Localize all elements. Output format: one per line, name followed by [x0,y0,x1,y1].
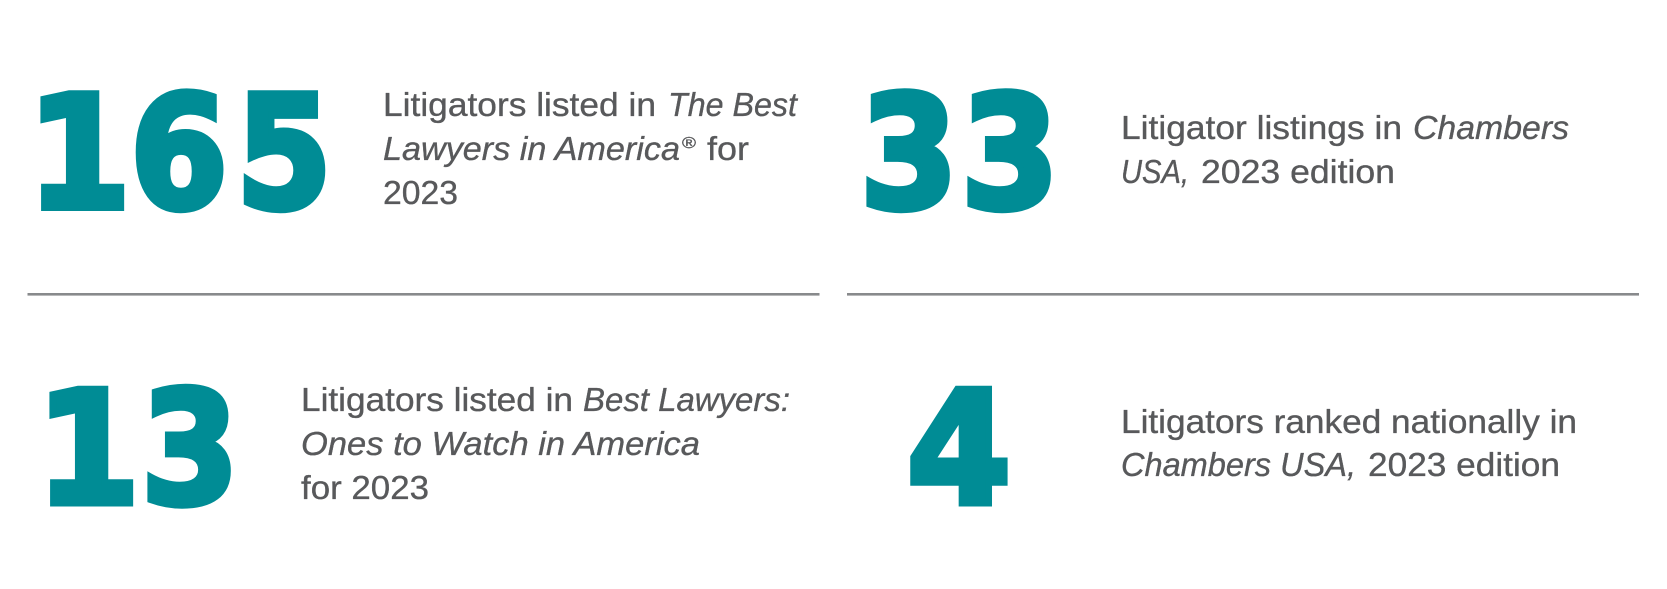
description: The Best Lawyers in America: The Best [668,87,799,124]
description: Chambers USA listings: 2023 edition [1201,154,1395,191]
big number: 33: 3 [860,62,958,244]
description: Ones to Watch in America: Best Lawyers: [583,382,790,419]
description: ranked nationally in Chambers USA: Litigators ranked nationally in [1121,404,1577,441]
big number: 13: 3 [141,358,239,540]
description: The Best Lawyers in America: Lawyers in America [383,131,680,168]
big number: 165 [27,62,332,245]
description: Chambers USA listings: USA, [1121,154,1189,191]
panel: 13 in Best Lawyers Ones to Watch [36,358,790,541]
description: Ones to Watch in America [301,382,790,507]
description: The Best Lawyers in America: Litigators listed in [383,87,656,124]
description: The Best Lawyers in America [383,87,799,212]
panel: 4 ranked nationally [907,359,1577,541]
description: Ones to Watch in America: for 2023 [301,470,429,507]
description: ranked nationally in Chambers USA [1121,404,1577,484]
divider: left [28,293,820,296]
big number: 33: 3 [961,62,1059,244]
description: ranked nationally in Chambers USA: Chambers USA, [1121,447,1356,484]
big number: 165: 1 [27,64,131,245]
description: The Best Lawyers in America: ® [682,135,696,152]
panel: 33 listings in Chambers USA [860,62,1569,244]
description: Ones to Watch in America: Litigators listed in [301,382,573,419]
description: Chambers USA listings [1121,110,1569,191]
big number: 33 [860,62,1059,244]
divider: right [847,293,1639,296]
description: The Best Lawyers in America: 2023 [383,175,458,212]
description: The Best Lawyers in America: for [707,131,749,168]
big number: 13 [36,358,239,541]
description: Chambers USA listings: Chambers [1413,110,1569,147]
description: Ones to Watch in America: Ones to Watch in America [301,426,700,463]
description: ranked nationally in Chambers USA: 2023 edition [1368,447,1560,484]
big number: 165: 6 [130,62,228,244]
panel: 165 litigators in The Best Lawyers [27,62,799,245]
big number: 4: 4 [907,359,1011,541]
description: Chambers USA listings: Litigator listings in [1121,110,1402,147]
big number: 165: 5 [236,63,332,245]
big number: 13: 1 [36,359,140,541]
